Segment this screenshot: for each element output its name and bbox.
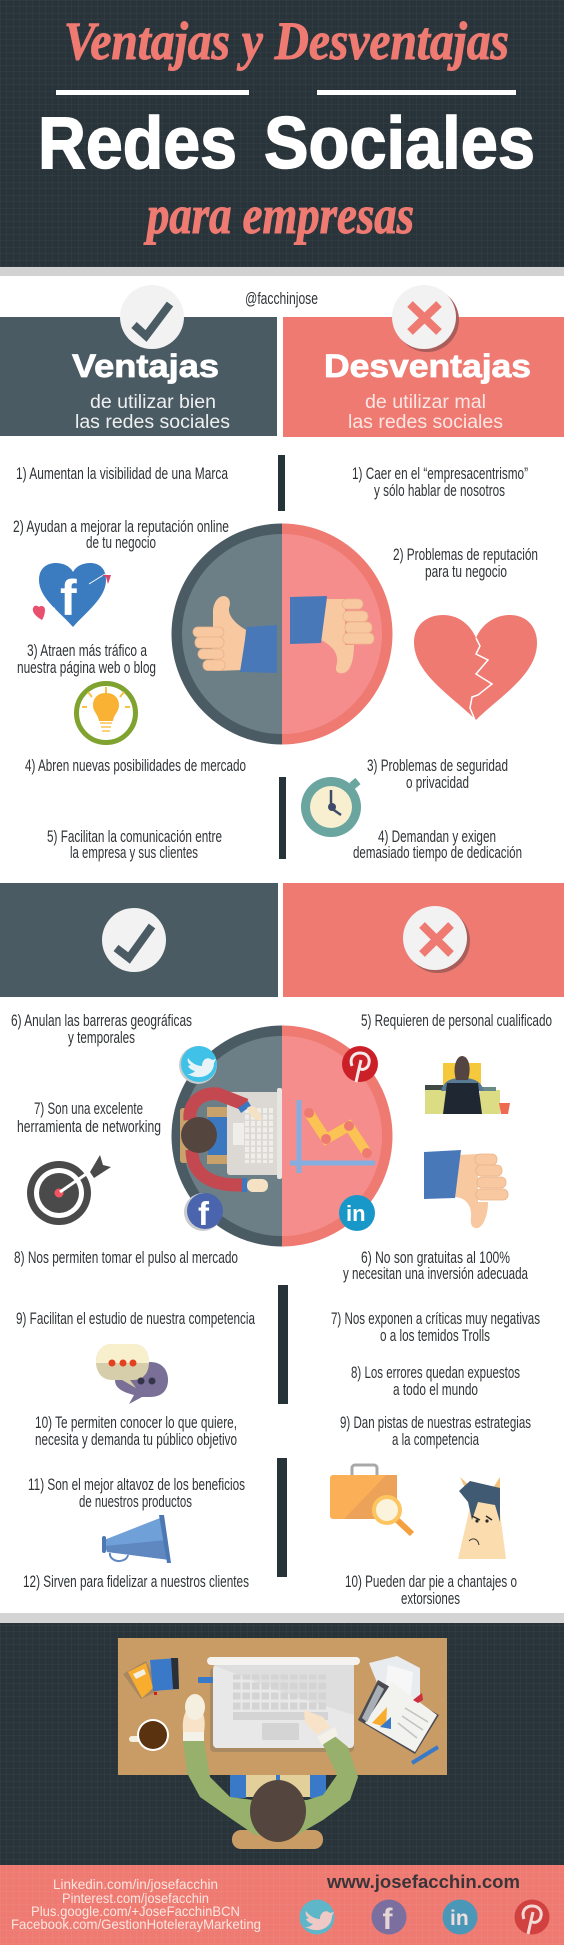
icon: linkedin <box>339 1195 375 1231</box>
text: ventaja 10: 10) Te permiten conocer lo que quiere, <box>35 1413 237 1432</box>
icon: facebook: f <box>198 1195 210 1232</box>
person: arms and head <box>183 1694 358 1842</box>
text: ventaja 2 <box>13 517 229 552</box>
panel: footer <box>0 1865 564 1945</box>
white rule left <box>56 90 249 95</box>
text: ventaja 5: 5) Facilitan la comunicación entre <box>47 827 222 846</box>
desk <box>118 1638 447 1775</box>
text: desventaja 2: para tu negocio <box>425 562 507 581</box>
text: ventaja 9: 9) Facilitan el estudio de nuestra competencia <box>16 1309 255 1328</box>
panel: ventajas <box>0 285 277 436</box>
text: ventaja 3: nuestra página web o blog <box>17 658 156 677</box>
subheading: de utilizar bien <box>90 392 216 413</box>
icon: target <box>27 1155 111 1225</box>
text: desventaja 6 <box>343 1248 528 1283</box>
text: ventaja 2: 2) Ayudan a mejorar la reputación online <box>13 517 229 536</box>
text: ventaja 6: y temporales <box>68 1028 135 1047</box>
social links: Linkedin.com/in/josefacchin <box>53 1876 218 1892</box>
text: ventaja 10 <box>35 1413 237 1449</box>
icon: pinterest <box>514 1900 550 1934</box>
text: desventaja 9: a la competencia <box>392 1430 479 1449</box>
text: ventaja 11 <box>28 1475 245 1511</box>
text: ventaja 6 <box>11 1011 192 1047</box>
text: ventaja 7: 7) Son una excelente <box>34 1099 143 1118</box>
grey band <box>0 1613 564 1623</box>
text: desventaja 8 <box>351 1363 520 1399</box>
text: desventaja 3 <box>367 756 508 792</box>
text: desventaja 4 <box>353 827 522 862</box>
text: ventaja 2: de tu negocio <box>86 533 156 552</box>
icon: briefcase with magnifier <box>330 1465 412 1534</box>
icon: angry man <box>458 1477 506 1559</box>
text: ventaja 3: 3) Atraen más tráfico a <box>27 641 147 660</box>
central circle: thumbs <box>172 524 392 744</box>
line chart <box>290 1100 375 1173</box>
title: Redes Sociales: Sociales <box>264 103 535 184</box>
divider bar <box>277 1458 287 1577</box>
subheading <box>75 392 230 433</box>
text: ventaja 5: la empresa y sus clientes <box>70 843 198 862</box>
text: ventaja 7: herramienta de networking <box>17 1117 161 1136</box>
central circle: desk and chart <box>172 1026 392 1246</box>
chair <box>232 1830 323 1849</box>
text: desventaja 1 <box>352 464 528 500</box>
text: ventaja 5 <box>47 827 222 862</box>
text: ventaja 11: de nuestros productos <box>79 1492 192 1511</box>
text: ventaja 11: 11) Son el mejor altavoz de los beneficios <box>28 1475 245 1494</box>
person at laptop <box>180 1088 282 1192</box>
icon: thumb down <box>290 596 374 673</box>
panel: desventajas <box>283 285 564 437</box>
icon: light bulb <box>76 684 136 742</box>
text: ventaja 4: 4) Abren nuevas posibilidades de mercado <box>25 756 246 775</box>
social links: Facebook.com/GestionHotelerayMarketing <box>11 1916 261 1932</box>
icon: cross <box>392 285 459 352</box>
title: Redes Sociales <box>38 103 535 184</box>
icon: pinterest <box>342 1046 378 1082</box>
text: desventaja 2 <box>393 545 538 581</box>
icon: megaphone <box>102 1515 171 1563</box>
heading: Desventajas: Desventajas <box>324 348 531 384</box>
text: ventaja 1: 1) Aumentan la visibilidad de una Marca <box>16 464 228 483</box>
text: desventaja 9 <box>340 1413 531 1449</box>
white rule right <box>317 90 516 95</box>
icon: linkedin: in <box>450 1907 469 1930</box>
social links: Pinterest.com/josefacchin <box>62 1890 209 1906</box>
icon: thumb down <box>424 1150 508 1228</box>
subtitle: para empresas: para empresas <box>144 185 414 245</box>
icon: facebook heart <box>33 563 111 627</box>
icon: books <box>123 1658 179 1699</box>
heading: Ventajas: Ventajas <box>72 348 219 384</box>
icon: coffee cup <box>129 1719 169 1751</box>
social links <box>11 1876 261 1932</box>
icon: linkedin: in <box>346 1201 366 1226</box>
icon: broken heart <box>414 615 537 720</box>
text: ventaja 10: necesita y demanda tu público objetivo <box>35 1430 237 1449</box>
text: desventaja 3: o privacidad <box>406 773 469 792</box>
title: Redes Sociales: Redes <box>38 103 237 184</box>
panel: desk illustration <box>0 1623 564 1865</box>
text: desventaja 4: 4) Demandan y exigen <box>378 827 496 846</box>
person: legs <box>230 1775 326 1798</box>
panel: header <box>0 0 564 276</box>
text: desventaja 10: extorsiones <box>401 1589 460 1608</box>
icon: facebook: f <box>382 1903 394 1936</box>
icon: facebook <box>372 1900 406 1936</box>
subheading: las redes sociales <box>75 412 230 433</box>
icon: facebook <box>184 1193 223 1232</box>
icon: clock <box>301 777 361 837</box>
text: desventaja 1: y sólo hablar de nosotros <box>374 481 505 500</box>
subheading <box>348 392 503 433</box>
icon: twitter <box>179 1046 217 1084</box>
text: ventaja 6: 6) Anulan las barreras geográficas <box>11 1011 192 1030</box>
panel: second desventajas band <box>283 883 564 997</box>
title: Ventajas y Desventajas: Ventajas y Desventajas <box>64 11 509 71</box>
icon: papers and notebook <box>358 1656 439 1763</box>
text: desventaja 8: a todo el mundo <box>393 1380 478 1399</box>
icon: chat bubbles <box>96 1344 168 1404</box>
text: ventaja 12: 12) Sirven para fidelizar a nuestros clientes <box>23 1572 249 1591</box>
icon: facebook heart: f <box>60 570 77 626</box>
icon: worker at desk <box>425 1056 510 1114</box>
icon: linkedin <box>442 1900 478 1934</box>
icon: twitter <box>300 1900 334 1934</box>
icon: check <box>120 285 184 349</box>
text: desventaja 10 <box>345 1572 517 1608</box>
panel: second ventajas band <box>0 883 278 997</box>
handle: @facchinjose <box>245 289 318 308</box>
divider bar <box>278 455 285 511</box>
subheading: de utilizar mal <box>365 392 486 413</box>
text: desventaja 7 <box>331 1309 540 1345</box>
subheading: las redes sociales <box>348 412 503 433</box>
icon: thumb up <box>193 596 277 673</box>
social links: Plus.google.com/+JoseFacchinBCN <box>31 1903 240 1919</box>
icon: laptop <box>198 1657 360 1752</box>
text: desventaja 7: o a los temidos Trolls <box>380 1326 490 1345</box>
text: ventaja 7 <box>17 1099 161 1136</box>
text: ventaja 8: 8) Nos permiten tomar el pulso al mercado <box>14 1248 238 1267</box>
divider bar <box>279 777 286 859</box>
text: ventaja 3 <box>17 641 156 677</box>
divider bar <box>278 1285 288 1404</box>
website: www.josefacchin.com <box>326 1872 520 1892</box>
